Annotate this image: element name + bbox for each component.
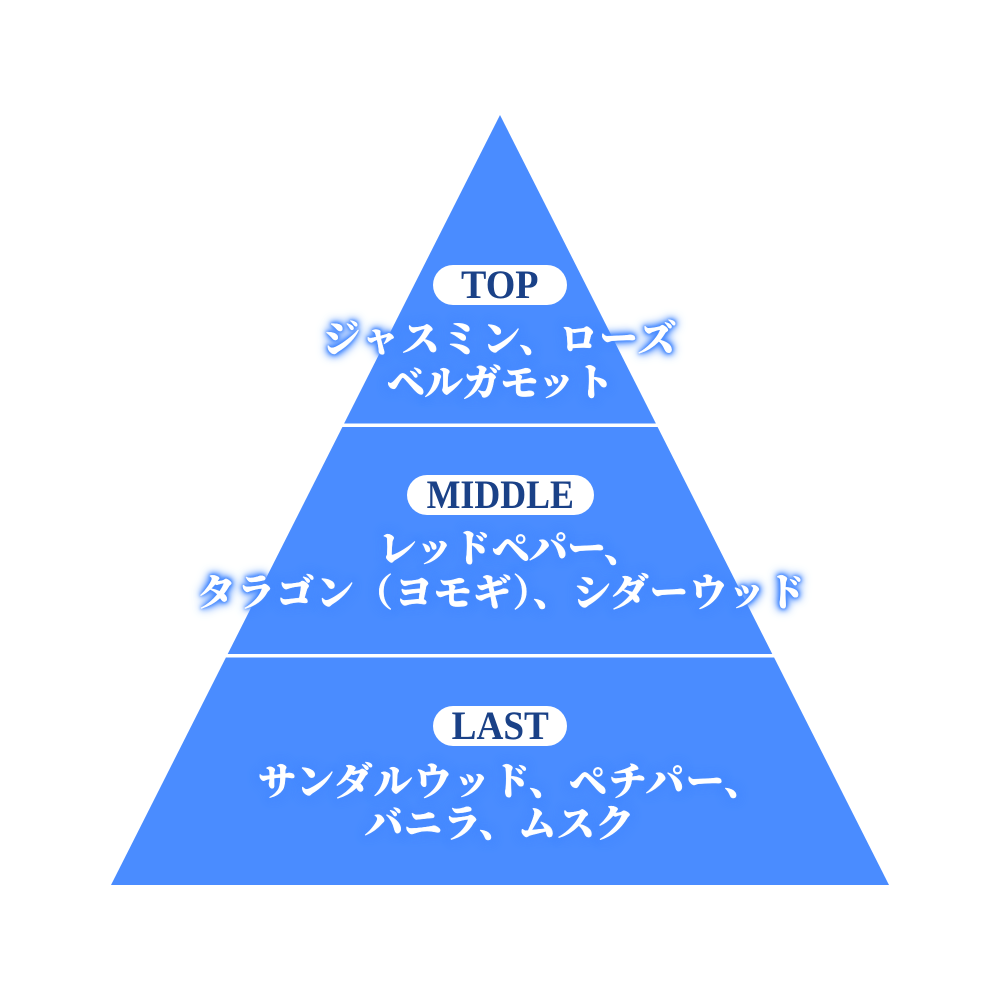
label: MIDDLE: MIDDLE — [427, 472, 574, 517]
text: top notes line 2: ベルガモット — [387, 363, 613, 405]
text: middle notes line 1: レッドペパー、 — [378, 529, 642, 571]
label: TOP: TOP — [461, 262, 539, 307]
text: last notes line 2: バニラ、ムスク — [365, 804, 635, 846]
text: middle notes line 2: タラゴン（ヨモギ）、シダーウッド — [197, 573, 807, 615]
label: LAST: LAST — [451, 703, 549, 748]
text: last notes line 1: サンダルウッド、ペチパー、 — [258, 762, 764, 804]
text: top notes line 1: ジャスミン、ローズ — [322, 319, 678, 361]
label: LAST — [433, 706, 567, 746]
label: TOP — [433, 265, 567, 305]
